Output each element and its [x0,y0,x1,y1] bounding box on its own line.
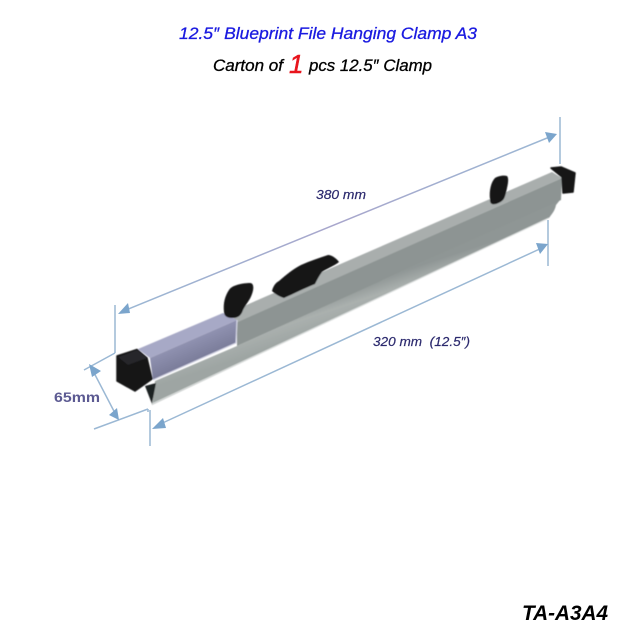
clear sleeve front [150,320,237,380]
label: 320 mm (12.5″): 320 mm (12.5″) [373,334,470,349]
left end cap [117,350,152,391]
subtitle end: pcs 12.5″ Clamp [308,57,432,75]
quantity figure: 1 [289,49,303,79]
top face of bar [228,172,562,322]
label: 65mm: 65mm [54,389,100,405]
dimension: 65 mm height [84,353,148,429]
black tip [145,383,156,404]
lip of the clamp [152,200,560,405]
label: 380 mm: 380 mm [316,187,366,202]
subtitle start: Carton of [213,57,285,75]
clear sleeve top [138,313,237,358]
centre clamp handle [272,255,339,298]
left knob [224,283,253,318]
product code: TA-A3A4 [522,602,608,625]
title: 12.5″ Blueprint File Hanging Clamp A3 [179,24,478,43]
right end cap [551,167,575,193]
sleeve edge highlight [153,320,237,380]
dimension: 320 mm length [150,220,548,446]
clamp product illustration [117,167,575,405]
front face of bar [237,178,562,346]
bottom edge highlight [152,218,549,404]
dimension: 380 mm length [115,117,560,353]
left cap front shading [118,350,147,365]
subtitle: carton quantity [213,49,432,79]
right knob [490,176,508,204]
